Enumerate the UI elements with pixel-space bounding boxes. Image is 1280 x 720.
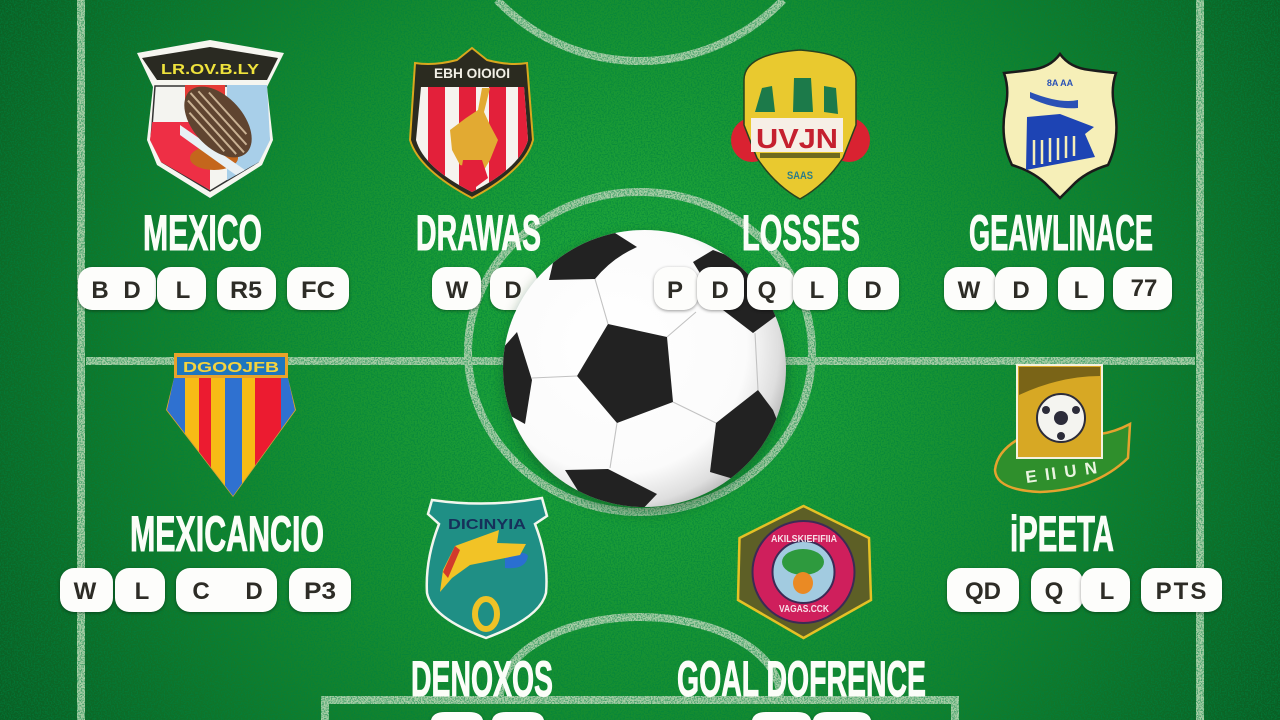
stat pills: Mexicancio: W <box>74 578 97 605</box>
stat pills: Geawlinace: 77 <box>1131 275 1157 302</box>
stat pills: Mexico: FC <box>301 277 335 304</box>
stat pills: Drawas: D <box>504 277 522 304</box>
icon: Losses crest: UVJN <box>756 123 838 154</box>
team: Geawlinace <box>944 54 1172 310</box>
icon: Ipeeta crest: E II U N <box>1024 458 1098 487</box>
stat pills: Losses: P <box>667 277 683 304</box>
icon: Mexicancio crest <box>165 353 297 498</box>
football <box>495 230 786 515</box>
team: Drawas <box>410 48 541 310</box>
heading: Goal Difference: GOAL DOFRENCE <box>677 651 926 707</box>
stat pills: Drawas: W <box>446 277 469 304</box>
icon: Mexico crest <box>137 40 284 198</box>
stat pills: Ipeeta <box>947 568 1222 612</box>
heading: Ipeeta: iPEETA <box>1010 506 1114 562</box>
team: Mexico <box>78 40 349 310</box>
heading: Denoxos: DENOXOS <box>411 651 553 707</box>
stat pills: Mexico: B <box>91 277 109 304</box>
icon: Geawlinace crest <box>1004 54 1116 198</box>
stat pills: Ipeeta: Q <box>1045 578 1063 605</box>
stat pills: Geawlinace: L <box>1074 277 1088 304</box>
team: Ipeeta <box>947 365 1222 612</box>
heading: Mexico: MEXICO <box>143 205 262 261</box>
stat pills: Losses: D <box>864 277 882 304</box>
icon: Drawas crest <box>410 48 533 198</box>
icon: Drawas crest: EBH OIOIOI <box>434 65 510 81</box>
stat pills: Goal Difference <box>752 712 871 720</box>
stat pills: Losses: L <box>810 277 824 304</box>
icon: Goal Difference crest <box>738 506 871 638</box>
icon: Losses crest: SAAS <box>787 170 813 182</box>
stat pills: Drawas <box>432 267 537 310</box>
icon: Denoxos crest <box>427 498 547 638</box>
stat pills: Mexicancio <box>60 568 351 612</box>
stat pills: Geawlinace <box>944 267 1172 310</box>
football shadow <box>504 236 786 512</box>
team: Mexicancio <box>60 353 351 612</box>
stat pills: Geawlinace: W <box>958 277 981 304</box>
stat pills: Denoxos <box>431 712 544 720</box>
team: Goal Difference <box>677 506 926 720</box>
stat pills: Mexico: R5 <box>230 277 262 304</box>
stat pills: Ipeeta: L <box>1100 578 1114 605</box>
stat pills: Mexicancio: L <box>135 578 149 605</box>
stat pills: Ipeeta: QD <box>965 578 1001 605</box>
stat pills: Geawlinace: D <box>1012 277 1030 304</box>
stat pills: Losses: D <box>711 277 729 304</box>
stat pills: Mexico: L <box>176 277 190 304</box>
heading: Drawas: DRAWAS <box>416 205 541 261</box>
stat pills: Ipeeta: PTS <box>1156 578 1208 605</box>
icon: Goal Difference crest: VAGAS.CCK <box>779 604 830 615</box>
stat pills: Mexico: D <box>123 277 141 304</box>
icon: Geawlinace crest: 8A AA <box>1047 78 1074 88</box>
icon: Ipeeta crest <box>995 365 1130 492</box>
icon: Losses crest <box>731 50 870 199</box>
stat pills: Losses <box>654 267 899 310</box>
icon: Mexico crest: LR.OV.B.LY <box>161 61 259 78</box>
team: Denoxos <box>411 498 553 720</box>
stat pills: Mexicancio: D <box>245 578 263 605</box>
heading: Mexicancio: MEXICANCIO <box>130 506 324 562</box>
stat pills: Mexicancio: C <box>192 578 210 605</box>
icon: Denoxos crest: DICINYIA <box>448 516 526 533</box>
icon: Mexicancio crest: DGOOJFB <box>183 359 279 376</box>
team: Losses <box>654 50 899 310</box>
stat pills: Mexico <box>78 267 349 310</box>
stat pills: Losses: Q <box>758 277 776 304</box>
heading: Losses: LOSSES <box>742 205 860 261</box>
icon: Goal Difference crest: AKILSKIEFIFIIA <box>771 534 837 545</box>
stat pills: Mexicancio: P3 <box>304 578 336 605</box>
